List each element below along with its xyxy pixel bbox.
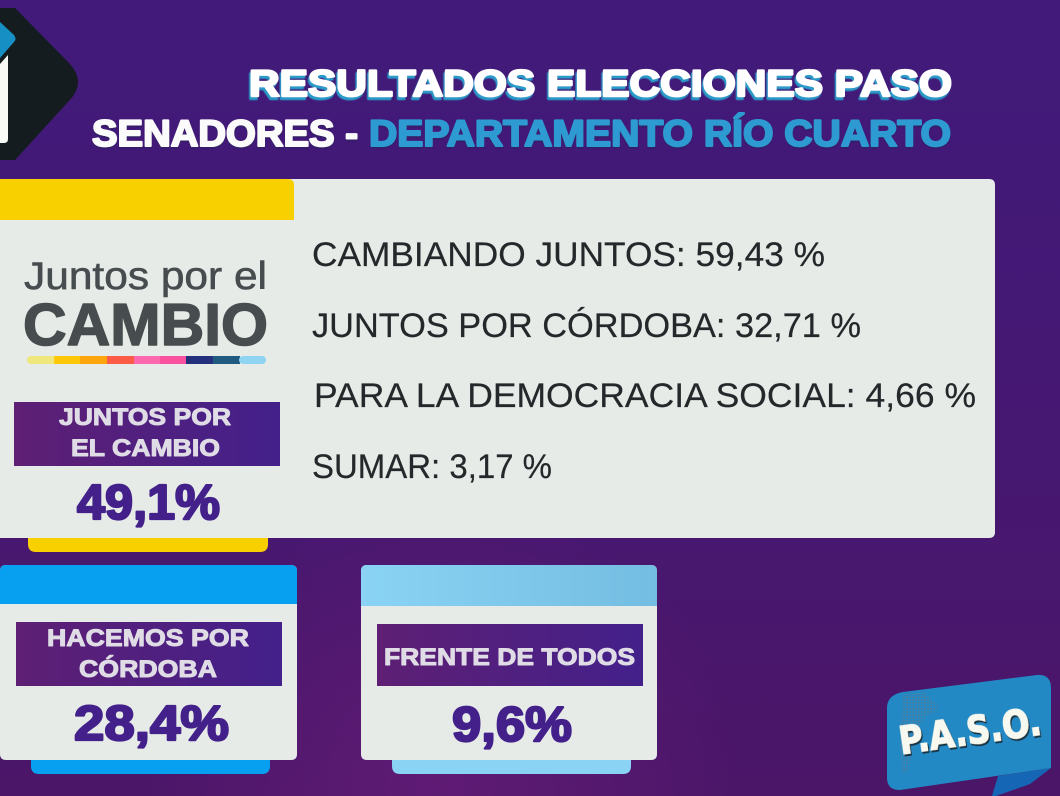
logo: Juntos por el Cambio: CAMBIO bbox=[23, 292, 268, 358]
blue header bbox=[0, 565, 297, 604]
label: Juntos por el Cambio: EL CAMBIO bbox=[71, 435, 220, 462]
percentage 49,1%: 49,1% bbox=[77, 476, 220, 530]
map silhouette bbox=[900, 693, 938, 775]
label: Juntos por el Cambio bbox=[14, 402, 280, 466]
label: CÓRDOBA bbox=[79, 655, 217, 683]
panel: Frente de Todos bbox=[361, 565, 657, 774]
logo: P.A.S.O. bubble bbox=[887, 675, 1051, 796]
sublist results: SUMAR: 3,17 % bbox=[312, 448, 552, 486]
panel: Hacemos por Córdoba bbox=[0, 565, 297, 774]
label: HACEMOS POR bbox=[47, 625, 249, 652]
logo: Juntos por el Cambio bbox=[23, 255, 268, 364]
percentage 28,4%: 28,4% bbox=[74, 697, 229, 751]
bubble body bbox=[887, 675, 1051, 790]
sublist results bbox=[312, 236, 976, 486]
logo: channel badge bbox=[0, 8, 78, 160]
sublist results: CAMBIANDO JUNTOS: 59,43 % bbox=[312, 236, 825, 274]
yellow tab under panel bbox=[28, 530, 268, 552]
blue tab bbox=[31, 750, 270, 774]
label bbox=[16, 622, 282, 686]
card body bbox=[361, 565, 657, 760]
yellow header bar bbox=[0, 179, 294, 220]
title line 2: SENADORES - bbox=[92, 113, 358, 154]
panel: Juntos por el Cambio bbox=[0, 179, 995, 552]
card body bbox=[0, 565, 297, 760]
title line 2: DEPARTAMENTO RÍO CUARTO bbox=[369, 113, 951, 154]
title bbox=[92, 63, 952, 154]
label: Juntos por el Cambio: JUNTOS POR bbox=[59, 404, 231, 431]
label: FRENTE DE TODOS bbox=[384, 644, 635, 671]
percentage 9,6%: 9,6% bbox=[452, 698, 572, 752]
colour stripe bbox=[27, 356, 266, 364]
logo: Juntos por el Cambio: Juntos por el bbox=[24, 255, 267, 298]
sublist results: JUNTOS POR CÓRDOBA: 32,71 % bbox=[312, 307, 861, 345]
title line 2 bbox=[92, 113, 951, 154]
title line 1: RESULTADOS ELECCIONES PASO bbox=[249, 63, 952, 104]
light blue header bbox=[361, 565, 657, 606]
bubble tail bbox=[992, 768, 1051, 796]
panel body bbox=[0, 179, 995, 538]
light blue tab bbox=[392, 750, 631, 774]
sublist results: PARA LA DEMOCRACIA SOCIAL: 4,66 % bbox=[314, 377, 976, 415]
label bbox=[377, 624, 643, 686]
